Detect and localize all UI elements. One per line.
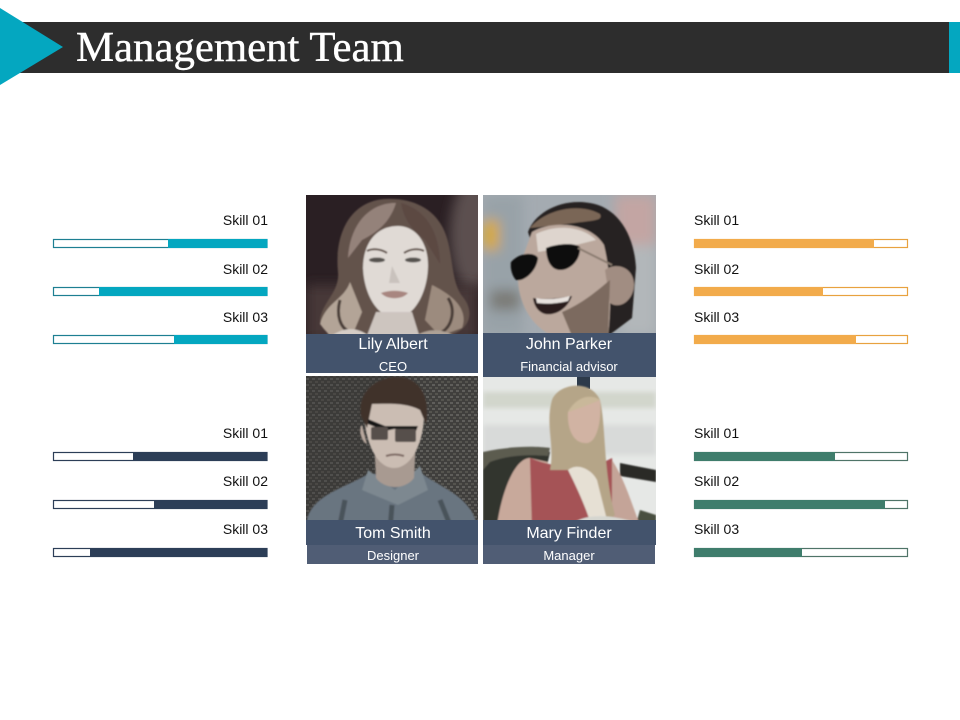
portrait card: Mary Finder [483, 377, 656, 564]
title: Management Team [76, 24, 404, 71]
skills panel: Mary Finder: Skill 02 [694, 473, 739, 489]
skills panel: Tom Smith: Skill 01 [223, 425, 268, 441]
header: title band [0, 8, 960, 85]
skills panel: Lily Albert: Skill 03 [223, 309, 268, 325]
name plate: Tom Smith [306, 520, 478, 564]
skills panel: Mary Finder: Skill 01 [694, 425, 739, 441]
skills panel: Mary Finder [694, 425, 908, 557]
skills panel: John Parker [694, 212, 908, 344]
skills panel: Mary Finder: Skill 03 [694, 521, 739, 537]
name plate: Tom Smith: Tom Smith [355, 525, 431, 542]
name plate: Lily Albert [306, 334, 478, 374]
name plate: Lily Albert: Lily Albert [358, 336, 428, 353]
name plate: Mary Finder: Manager [543, 548, 595, 563]
name plate: Mary Finder [483, 520, 656, 564]
name plate: Mary Finder: Mary Finder [526, 525, 612, 542]
skills panel: Tom Smith: Skill 03 [223, 521, 268, 537]
portrait card: Lily Albert [306, 195, 478, 373]
name plate: Tom Smith: Designer [367, 548, 420, 563]
portrait card: Tom Smith [306, 376, 478, 564]
skills panel: John Parker: Skill 02 [694, 261, 739, 277]
portrait card: John Parker [483, 195, 656, 377]
skills panel: Tom Smith: Skill 02 [223, 473, 268, 489]
name plate: John Parker [483, 333, 656, 377]
skills panel: Lily Albert: Skill 01 [223, 212, 268, 228]
skills panel: Lily Albert: Skill 02 [223, 261, 268, 277]
skills panel: John Parker: Skill 01 [694, 212, 739, 228]
name plate: John Parker: John Parker [526, 336, 613, 353]
name plate: Lily Albert: CEO [379, 359, 407, 374]
name plate: John Parker: Financial advisor [520, 359, 618, 374]
skills panel: Tom Smith [54, 425, 268, 557]
skills panel: John Parker: Skill 03 [694, 309, 739, 325]
skills panel: Lily Albert [54, 212, 268, 344]
